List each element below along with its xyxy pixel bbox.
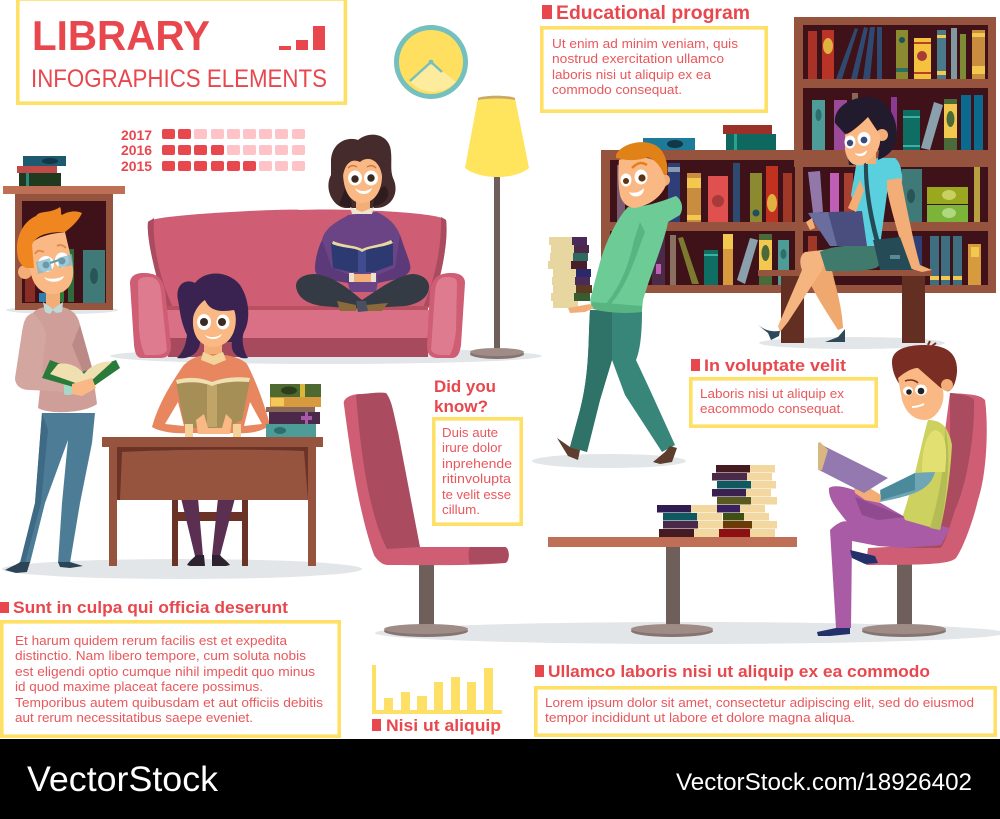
- person: boy carrying books: [548, 142, 682, 464]
- section: Sunt in culpa: aut rerum necessitatibus saepe eveniet.: [15, 710, 253, 725]
- title: LIBRARY: LIBRARY: [32, 12, 210, 59]
- section: Ullamco laboris: Ullamco laboris nisi ut aliquip ex ea commodo: [548, 662, 930, 681]
- year progress chart: [121, 127, 305, 174]
- section: Sunt in culpa: Et harum quidem rerum facilis est et expedita: [15, 633, 288, 648]
- person: woman cross-legged on sofa: [296, 135, 429, 312]
- desk: [102, 437, 323, 566]
- section: Ullamco laboris: Lorem ipsum dolor sit amet, consectetur adipiscing elit, sed do eiusmod: [545, 695, 974, 710]
- section: Sunt in culpa: Temporibus autem quibusdam et aut officiis debitis: [15, 695, 324, 710]
- callout: Did you know?: ritinvolupta: [442, 471, 512, 486]
- person: woman on bench: [758, 97, 932, 342]
- section: Educational program: laboris nisi ut aliquip ex ea: [552, 67, 712, 82]
- lower bookshelf: [601, 125, 996, 293]
- small bookshelf: [3, 156, 125, 310]
- book stack on desk: [266, 384, 321, 437]
- year progress chart: 2017: [121, 127, 152, 143]
- callout: Did you know?: irure dolor: [442, 440, 503, 455]
- book stack carried: [548, 237, 592, 308]
- floor shadows: [2, 306, 1000, 644]
- section: Educational program: Ut enim ad minim veniam, quis: [552, 36, 739, 51]
- section: Educational program: [542, 3, 766, 111]
- books on shelf top: [643, 125, 776, 150]
- section: Sunt in culpa: [0, 598, 339, 736]
- callout: Did you know?: [434, 377, 521, 524]
- icon: wall clock: [394, 25, 468, 99]
- callout: Did you know?: te velit esse: [442, 487, 511, 502]
- callout: Did you know?: know?: [434, 397, 488, 416]
- mini bar chart: Nisi ut aliquip: [372, 665, 502, 735]
- year progress chart: 2015: [121, 158, 152, 174]
- callout: Did you know?: Did you: [434, 377, 496, 396]
- section: Educational program: nostrud exercitation ullamco: [552, 51, 724, 66]
- title panel: [18, 0, 345, 103]
- footer: watermark bar: VectorStock: [27, 760, 219, 799]
- section: Ullamco laboris: tempor incididunt ut labore et dolore magna aliqua.: [545, 710, 855, 725]
- tall bookshelf: [794, 17, 996, 167]
- person: man with glasses: [5, 207, 120, 573]
- footer: watermark bar: VectorStock.com/18926402: [676, 769, 972, 796]
- section: Educational program: commodo consequat.: [552, 82, 682, 97]
- callout: Did you know?: inprehende: [442, 456, 512, 471]
- footer: watermark bar: [0, 739, 1000, 819]
- section: Sunt in culpa: id quod maxime placeat facere possimus.: [15, 679, 263, 694]
- icon: rising bars: [279, 26, 325, 50]
- coffee table with books: [548, 465, 797, 637]
- section: In voluptate velit: [691, 356, 876, 426]
- floor lamp: [465, 96, 529, 359]
- subtitle: INFOGRAPHICS ELEMENTS: [31, 65, 327, 93]
- armchair left: [344, 393, 509, 637]
- callout: Did you know?: Duis aute: [442, 425, 498, 440]
- section: Sunt in culpa: distinctio. Nam libero tempore, cum soluta nobis: [15, 648, 307, 663]
- section: In voluptate velit: In voluptate velit: [704, 356, 846, 375]
- year progress chart: 2016: [121, 142, 152, 158]
- person: girl at desk (body): [152, 273, 270, 566]
- person: girl's open book: [176, 377, 250, 437]
- sofa: [130, 209, 465, 358]
- section: Ullamco laboris: [535, 662, 995, 735]
- section: Sunt in culpa: est eligendi optio cumque nihil impedit quo minus: [15, 664, 316, 679]
- bench: [758, 270, 932, 343]
- mini bar chart: Nisi ut aliquip: Nisi ut aliquip: [386, 716, 501, 735]
- section: Sunt in culpa: Sunt in culpa qui officia deserunt: [13, 598, 288, 617]
- section: Educational program: Educational program: [556, 3, 750, 24]
- person: boy reading in armchair: [817, 341, 987, 637]
- section: In voluptate velit: Laboris nisi ut aliquip ex: [700, 386, 845, 401]
- callout: Did you know?: cillum.: [442, 502, 480, 517]
- section: In voluptate velit: eacommodo consequat.: [700, 401, 844, 416]
